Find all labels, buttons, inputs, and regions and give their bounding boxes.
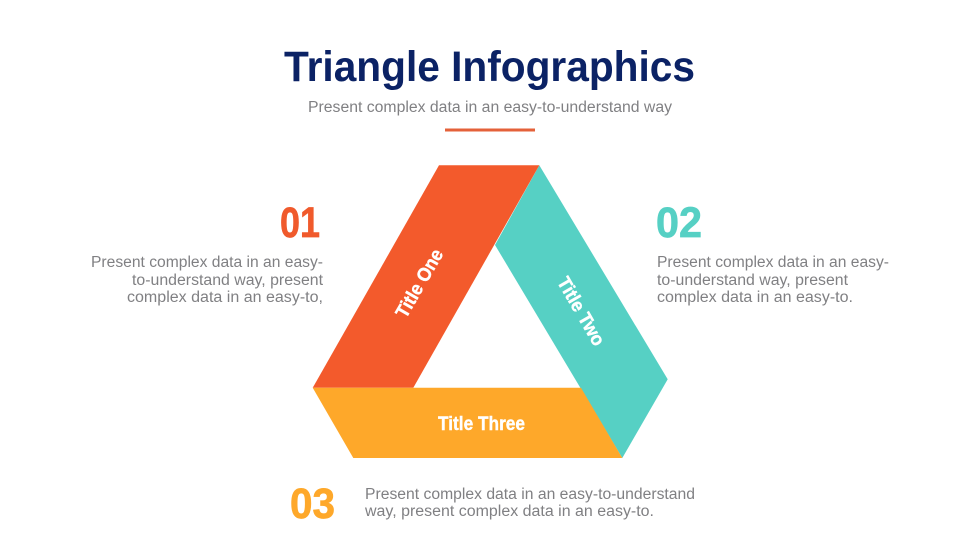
text block 03 bbox=[364, 486, 695, 520]
callout 03 bbox=[290, 480, 695, 528]
text block 01: to-understand way, present bbox=[132, 272, 324, 289]
number 03: 03 bbox=[290, 480, 335, 528]
text block 03: Present complex data in an easy-to-understand bbox=[365, 486, 695, 503]
text block 02: to-understand way, present bbox=[657, 272, 849, 289]
callout 01 bbox=[91, 199, 324, 306]
callout 02 bbox=[656, 199, 889, 306]
text block 02: Present complex data in an easy- bbox=[657, 254, 889, 271]
text block 02 bbox=[657, 254, 889, 306]
number 01: 01 bbox=[280, 199, 320, 247]
triangle diagram bbox=[313, 165, 668, 458]
label: title three: Title Three bbox=[438, 414, 525, 435]
text block 01 bbox=[91, 254, 324, 306]
text block 01: complex data in an easy-to, bbox=[127, 289, 323, 306]
segment: title one bbox=[313, 165, 539, 388]
segment: title three bbox=[313, 388, 622, 458]
title: Triangle Infographics bbox=[284, 43, 695, 91]
text block 03: way, present complex data in an easy-to. bbox=[364, 503, 654, 520]
segment: title two bbox=[495, 165, 668, 458]
label: title one: Title One bbox=[392, 246, 448, 322]
label: title two: Title Two bbox=[552, 274, 609, 350]
title underline accent bbox=[445, 128, 535, 132]
text block 02: complex data in an easy-to. bbox=[657, 289, 853, 306]
number 02: 02 bbox=[656, 199, 702, 247]
subtitle: Present complex data in an easy-to-understand way bbox=[308, 99, 672, 116]
text block 01: Present complex data in an easy- bbox=[91, 254, 323, 271]
